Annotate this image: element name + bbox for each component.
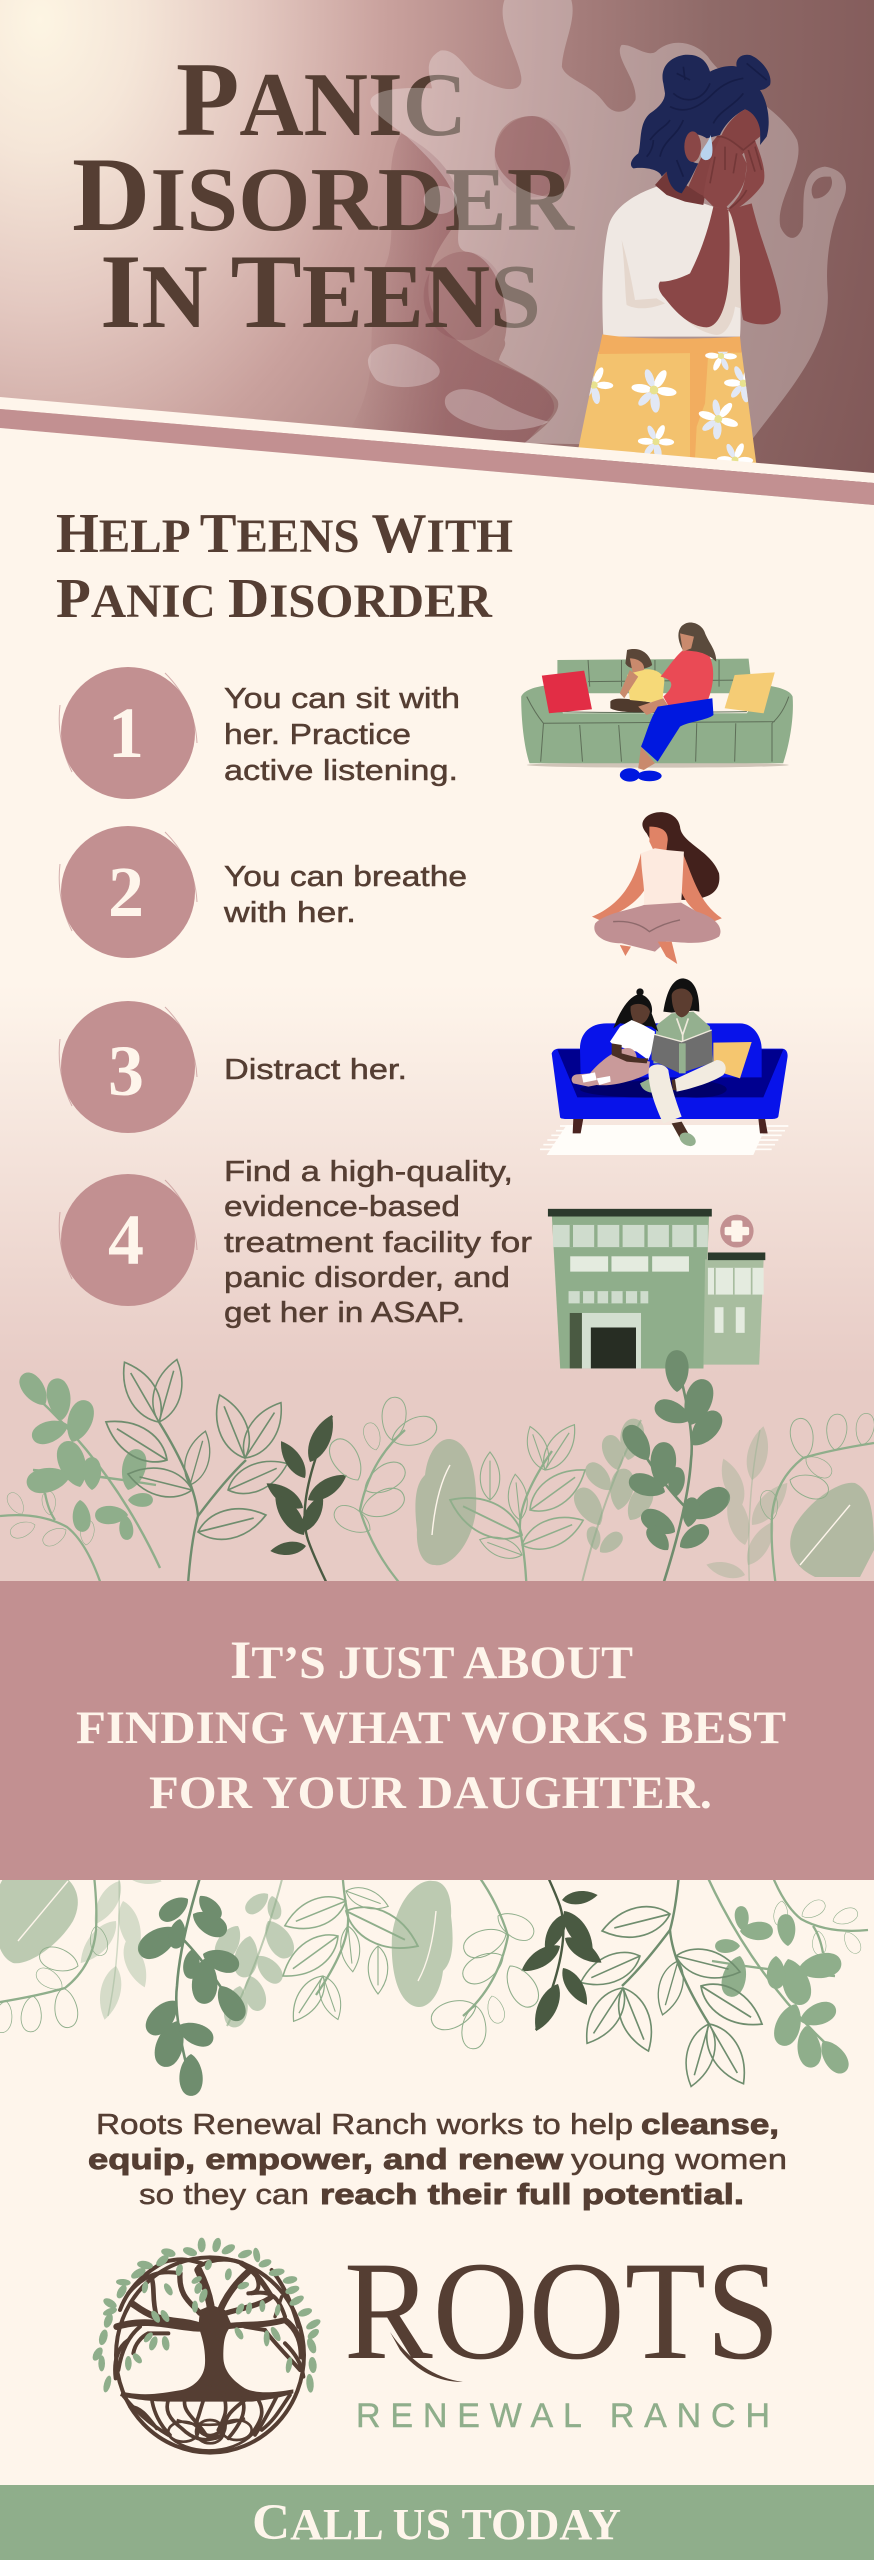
band message: IT’S JUST ABOUT <box>230 1630 633 1690</box>
face <box>688 109 760 197</box>
translucent splash overlay <box>368 0 846 447</box>
band message: FOR YOUR DAUGHTER. <box>149 1767 712 1819</box>
number badge 1: 1 <box>108 693 144 773</box>
text step 4: get her in ASAP. <box>224 1297 465 1329</box>
ear <box>684 131 701 162</box>
flowers <box>589 352 754 462</box>
call to action: CALL US TODAY <box>252 2495 621 2551</box>
panel: footer call to action <box>0 2485 874 2560</box>
number badge 4: 4 <box>108 1200 144 1280</box>
heading: help teens <box>56 503 513 630</box>
panel: header <box>0 0 874 520</box>
daughter <box>572 988 658 1087</box>
illustration: mother and daughter reading on blue sofa <box>540 978 788 1155</box>
sofa body <box>552 1023 788 1119</box>
footer background <box>0 2485 874 2560</box>
step 4 <box>59 1156 765 1368</box>
neck <box>655 172 705 205</box>
logo <box>91 2233 780 2453</box>
text step 2: You can breathe <box>224 861 467 893</box>
text step 1: her. Practice <box>224 719 411 751</box>
logo wordmark renewal ranch: RENEWAL RANCH <box>356 2397 770 2435</box>
band background <box>0 1581 874 1880</box>
right arm <box>728 203 781 324</box>
dark background splash <box>346 116 570 445</box>
plants below band <box>0 1846 868 2096</box>
illustration: mother and daughter on green sofa <box>521 622 793 782</box>
band message: FINDING WHAT WORKS BEST <box>76 1702 786 1754</box>
heading: help teens: PANIC DISORDER <box>56 568 493 630</box>
left arm <box>659 207 730 327</box>
text step 1 <box>224 683 460 787</box>
title: IN TEENS <box>100 233 541 350</box>
diagonal rose stripe <box>0 409 874 505</box>
logo tree emblem <box>91 2237 322 2453</box>
mission statement: cleanse, <box>641 2109 779 2141</box>
step 1 <box>59 622 793 799</box>
text step 1: active listening. <box>224 755 458 787</box>
tear <box>701 135 712 160</box>
number badge 3 <box>59 1001 197 1133</box>
text step 4: evidence-based <box>224 1191 460 1223</box>
title <box>72 41 575 350</box>
text step 4 <box>224 1156 532 1329</box>
roots <box>123 2387 290 2440</box>
pillow <box>713 1042 752 1078</box>
illustration: treatment facility building <box>548 1209 765 1368</box>
waistband <box>598 334 742 354</box>
text step 2: with her. <box>223 897 356 929</box>
heading: help teens: HELP TEENS WITH <box>56 503 513 565</box>
title: PANIC <box>176 41 467 158</box>
mission statement: equip, empower, and renew <box>88 2144 564 2176</box>
diagonal cream stripe <box>0 397 874 483</box>
mother <box>640 978 726 1149</box>
teen girl covering her face <box>575 55 781 479</box>
shorts <box>578 352 757 467</box>
gradient lower section background <box>0 985 874 1585</box>
band message <box>76 1630 786 1819</box>
number badge 4 <box>59 1174 197 1306</box>
celtic knot <box>168 2418 253 2450</box>
text step 1: You can sit with <box>224 683 460 715</box>
cream below stripes <box>0 428 874 520</box>
mission statement: reach their full potential. <box>320 2179 744 2211</box>
sofa legs <box>573 1118 768 1133</box>
plants above band <box>0 1350 874 1600</box>
illustration: meditating woman <box>592 812 722 964</box>
text step 2 <box>223 861 467 929</box>
step 2 <box>59 812 722 964</box>
outer ring and branches <box>115 2257 304 2453</box>
mission statement: so they can <box>139 2179 309 2211</box>
hands <box>703 135 764 212</box>
rug <box>547 1125 767 1155</box>
title: DISORDER <box>72 136 575 253</box>
number badge 3: 3 <box>108 1031 144 1111</box>
hair <box>631 55 771 193</box>
R tail <box>390 2332 463 2382</box>
number badge 2: 2 <box>108 852 144 932</box>
text step 4: Find a high-quality, <box>224 1156 513 1188</box>
step 3 <box>59 978 788 1155</box>
header gradient background <box>0 0 874 510</box>
logo wordmark ROOTS: ROOTS <box>344 2233 780 2389</box>
text step 3: Distract her. <box>224 1054 407 1086</box>
text step 4: treatment facility for <box>224 1227 532 1259</box>
trunk <box>120 2305 293 2402</box>
number badge 1 <box>59 667 197 799</box>
number badge 2 <box>59 826 197 958</box>
mission statement: young women <box>571 2144 787 2176</box>
shirt <box>602 187 741 337</box>
mission statement <box>88 2109 787 2211</box>
leaves <box>91 2237 322 2393</box>
panel: message band <box>0 1581 874 1880</box>
text step 4: panic disorder, and <box>224 1262 510 1294</box>
mission statement: Roots Renewal Ranch works to help <box>96 2109 633 2141</box>
